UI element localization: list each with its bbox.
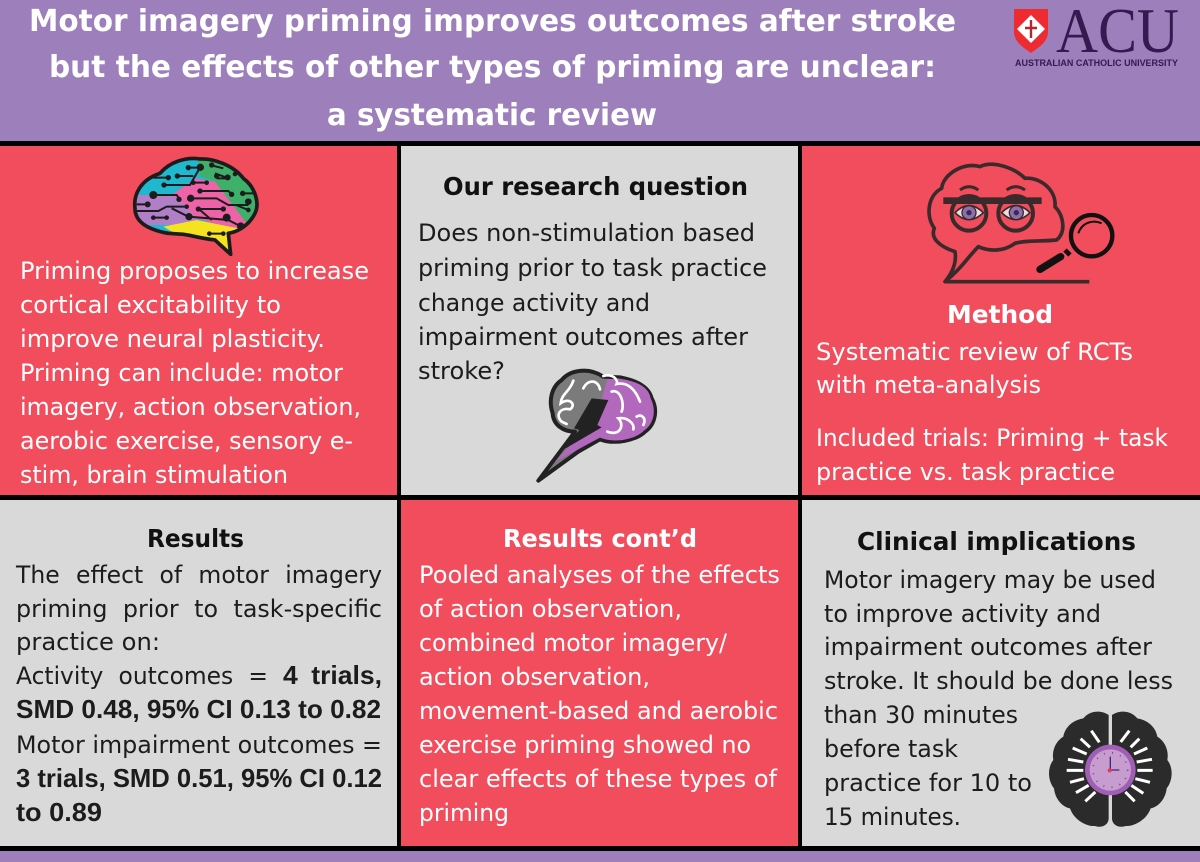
text: research question: impairment outcomes after	[418, 323, 748, 351]
text: research question	[418, 219, 767, 385]
panel: method	[802, 146, 1200, 495]
text: clinical implications detail: 15 minutes.	[824, 803, 961, 831]
panel: results continued	[401, 500, 798, 846]
text: results detail: Motor impairment outcomes =	[16, 731, 382, 759]
title	[29, 4, 956, 133]
title: a systematic review	[327, 98, 657, 133]
text: clinical implications detail: practice for 10 to	[824, 769, 1032, 797]
logo: ACU	[1014, 0, 1179, 69]
text: clinical implications detail: Motor imagery may be used	[824, 566, 1156, 594]
text: priming description: aerobic exercise, sensory e-	[20, 427, 353, 455]
text: pooled analyses	[419, 561, 780, 827]
text: pooled analyses: action observation,	[419, 663, 650, 691]
text: priming description: Priming can include: motor	[20, 359, 343, 387]
icon: brain with clock	[1049, 712, 1172, 827]
icon: brain with glasses and magnifier	[929, 164, 1112, 282]
footer band	[0, 851, 1200, 862]
panel: results	[0, 500, 397, 846]
text: research question: change activity and	[418, 289, 650, 317]
panel: priming background	[0, 146, 397, 495]
text: method description	[816, 338, 1168, 486]
text: results detail: The effect of motor imagery	[15, 561, 382, 589]
text: method description: with meta-analysis	[816, 371, 1041, 399]
panel: research question	[401, 146, 798, 495]
header band	[0, 0, 1200, 141]
text: pooled analyses: exercise priming showed no	[419, 731, 751, 759]
text: clinical implications detail: to improve activity and	[824, 600, 1101, 628]
text: priming description: cortical excitability to	[20, 291, 281, 319]
text: clinical implications detail: stroke. It should be done less	[824, 667, 1173, 695]
text: results detail: to 0.89	[16, 797, 102, 827]
text: results detail: priming prior to task-specific	[16, 595, 382, 623]
text: results detail: practice on:	[16, 628, 160, 656]
text: results detail: 4 trials,	[283, 660, 382, 690]
text: priming description: Priming proposes to increase	[20, 257, 369, 285]
heading: our research question: Our research question	[443, 172, 748, 201]
text: research question: priming prior to task practice	[418, 254, 767, 282]
text: method description: practice vs. task practice	[816, 458, 1115, 486]
text: pooled analyses: movement-based and aerobic	[419, 697, 778, 725]
text: priming description: imagery, action observation,	[20, 393, 361, 421]
heading: clinical implications: Clinical implications	[857, 527, 1136, 556]
text: results detail: 3 trials, SMD 0.51, 95% CI 0.12	[16, 763, 382, 793]
text: pooled analyses: Pooled analyses of the effects	[419, 561, 780, 589]
title: but the effects of other types of priming are unclear:	[49, 50, 936, 85]
text: clinical implications detail	[824, 566, 1173, 831]
heading: results: Results	[147, 524, 244, 553]
text: method description: Included trials: Priming + task	[816, 424, 1168, 452]
icon: lightning brain	[538, 371, 655, 481]
text: results detail: Activity outcomes =	[16, 662, 268, 690]
heading: results cont'd: Results cont’d	[503, 524, 697, 553]
title: Motor imagery priming improves outcomes after stroke	[29, 4, 956, 39]
text: clinical implications detail: before task	[824, 735, 958, 763]
text: pooled analyses: priming	[419, 799, 509, 827]
icon: circuit brain	[132, 156, 259, 256]
logo: ACU: AUSTRALIAN CATHOLIC UNIVERSITY	[1015, 58, 1179, 69]
text: priming description: stim, brain stimulation	[20, 461, 288, 489]
text: priming description: improve neural plasticity.	[20, 325, 325, 353]
text: results detail	[15, 561, 382, 827]
text: clinical implications detail: impairment outcomes after	[824, 633, 1152, 661]
text: priming description	[20, 257, 369, 489]
text: results detail: SMD 0.48, 95% CI 0.13 to 0.82	[16, 694, 381, 724]
text: pooled analyses: of action observation,	[419, 595, 682, 623]
panel: clinical implications	[802, 500, 1200, 846]
text: method description: Systematic review of RCTs	[816, 338, 1133, 366]
text: research question: stroke?	[418, 357, 505, 385]
text: clinical implications detail: than 30 minutes	[824, 701, 1018, 729]
heading: method: Method	[947, 300, 1053, 329]
text: pooled analyses: combined motor imagery/	[419, 629, 728, 657]
text: pooled analyses: clear effects of these types of	[419, 765, 778, 793]
text: research question: Does non-stimulation based	[418, 219, 755, 247]
